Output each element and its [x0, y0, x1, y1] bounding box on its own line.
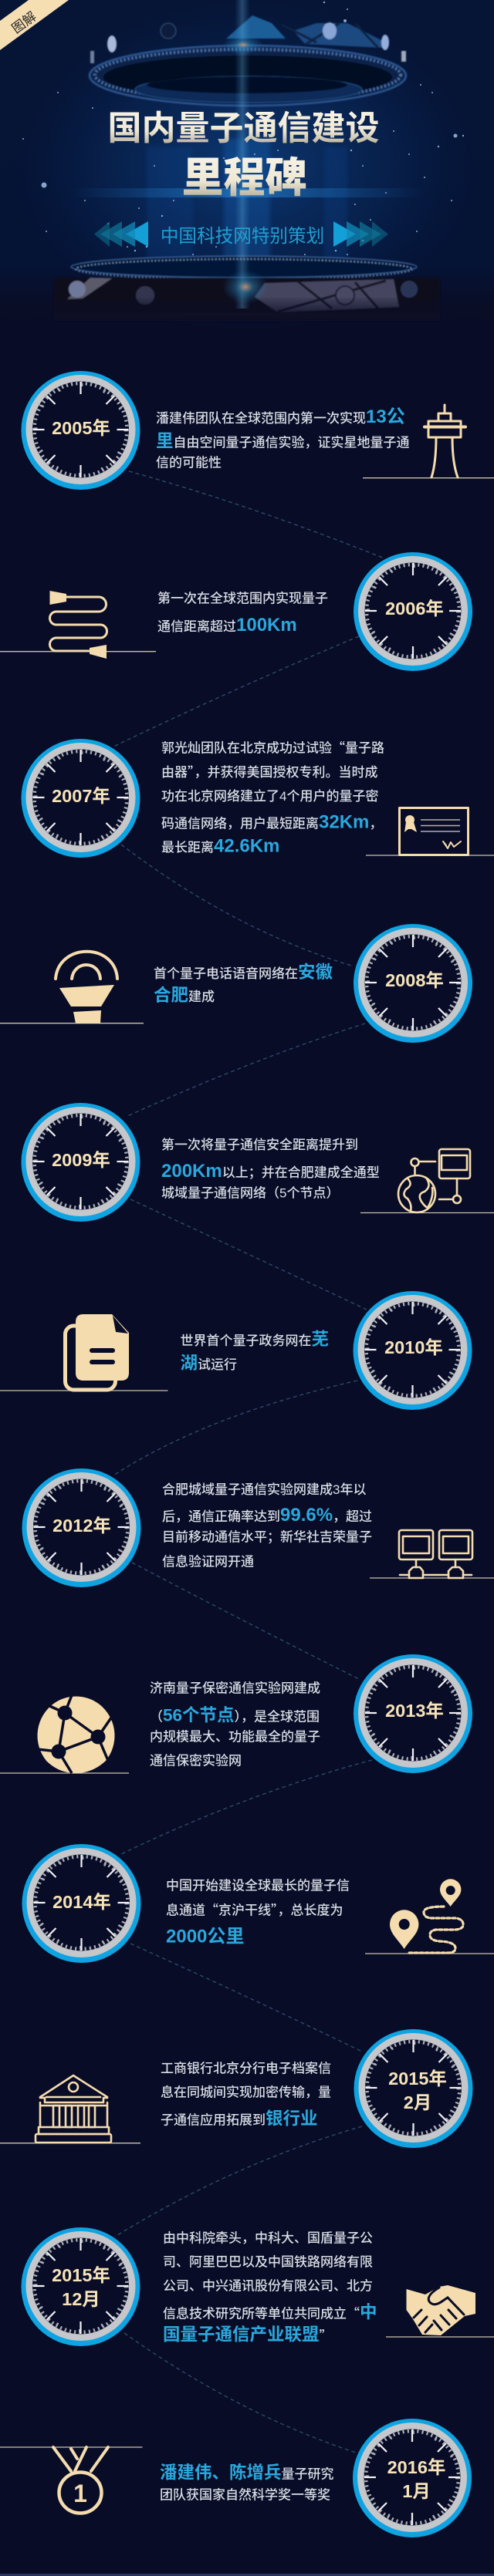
text: 2015-12 — [163, 2230, 377, 2345]
text: 2013: 济南量子保密通信实验网建成 — [150, 1680, 320, 1695]
text: 2015-12: 国量子通信产业联盟” — [163, 2325, 333, 2345]
upper ring — [90, 46, 406, 106]
title: 里程碑 — [182, 155, 307, 201]
clock: 2016年1月 — [353, 2419, 472, 2537]
text: 2006 — [157, 591, 328, 636]
text: 2012: 目前移动通信水平；新华社吉荣量子 — [162, 1530, 372, 1544]
text: 2005: 信的可能性 — [156, 455, 222, 470]
icon: two computers — [399, 1530, 472, 1578]
panel: 2015-12 — [22, 2227, 475, 2346]
text: 2007: 由器”，并获得美国授权专利。当时成 — [161, 761, 378, 781]
icon: cable — [49, 591, 107, 659]
clock: 2016年1月: 1月 — [402, 2481, 431, 2501]
text: 2010 — [181, 1330, 329, 1373]
text: 2015-02: 工商银行北京分行电子档案信 — [161, 2061, 331, 2076]
text: 2007: 码通信网络，用户最短距离32Km， — [161, 811, 382, 833]
icon: medal — [53, 2447, 108, 2513]
text: 2009: 200Km以上；并在合肥建成全通型 — [161, 1161, 380, 1182]
ribbon: 图解: 图解 — [9, 9, 39, 36]
text: 2013: 内规模最大、功能最全的量子 — [150, 1729, 320, 1745]
text: 2007 — [161, 737, 384, 856]
clock: 2005 — [22, 371, 140, 490]
title — [108, 110, 380, 201]
panel: 2008 — [56, 924, 472, 1043]
text: 2009: 城域量子通信网络（5个节点） — [161, 1185, 339, 1200]
text: 2012 — [162, 1482, 372, 1569]
clock: 2015年2月: 2015年 — [388, 2069, 447, 2089]
clock: 2013 — [354, 1654, 472, 1773]
clock: 2006 — [354, 552, 472, 671]
icon: documents — [65, 1314, 129, 1390]
text: 2015-12: 司、阿里巴巴以及中国铁路网络有限 — [163, 2254, 373, 2269]
panel: 2009 — [22, 1103, 470, 1222]
clock: 2015年12月: 12月 — [62, 2289, 100, 2309]
light beams — [69, 0, 425, 309]
upper ring plates — [90, 15, 406, 63]
text: 2015-12: 信息技术研究所等单位共同成立“中 — [163, 2303, 377, 2321]
icon baselines — [363, 477, 494, 479]
text: 2005: 里自由空间量子通信实验，证实星地量子通 — [156, 432, 410, 450]
text: 2016 — [160, 2463, 334, 2502]
text: 2009: 第一次将量子通信安全距离提升到 — [161, 1137, 358, 1152]
clock: 2016年1月: 2016年 — [387, 2457, 445, 2477]
icon: map pins — [390, 1879, 463, 1953]
text: 2016: 团队获国家自然科学奖一等奖 — [160, 2487, 330, 2502]
text: 2014: 息通道“京沪干线”，总长度为 — [166, 1899, 343, 1919]
panel: 2015-02 — [36, 2029, 472, 2148]
clock: 2009 — [22, 1103, 140, 1222]
lower ring — [54, 256, 440, 321]
text: 2010: 湖试运行 — [181, 1354, 237, 1373]
text: 2013: （56个节点），是全球范围 — [150, 1706, 320, 1725]
icon: certificate — [400, 808, 468, 855]
text: 2012: 合肥城域量子通信实验网建成3年以 — [162, 1482, 366, 1497]
clock: 2010 — [354, 1291, 472, 1410]
text: 2014: 2000公里 — [166, 1927, 244, 1947]
text: 2015-02: 子通信应用拓展到银行业 — [161, 2109, 318, 2129]
clock: 2008 — [354, 924, 472, 1043]
text: 2014: 中国开始建设全球最长的量子信 — [166, 1877, 350, 1893]
text: 2008 — [154, 963, 333, 1005]
text: 2007: 最长距离42.6Km — [161, 836, 279, 856]
clock: 2015年2月 — [354, 2029, 472, 2148]
panel: 2006 — [49, 552, 472, 671]
panel: 2012 — [22, 1468, 472, 1587]
text: 2007: 郭光灿团队在北京成功过试验“量子路 — [161, 737, 384, 756]
panel: 2007 — [22, 737, 468, 858]
icon: bank — [36, 2075, 111, 2143]
panel: 2005 — [22, 371, 465, 490]
panel: 2016 — [53, 2419, 472, 2537]
text: 2006: 通信距离超过100Km — [157, 615, 297, 636]
text: 2005 — [156, 406, 410, 470]
clock: 2014 — [22, 1844, 140, 1963]
clock: 2009: 2009年 — [52, 1150, 110, 1170]
text: 2014 — [166, 1877, 350, 1947]
text: 2012: 信息验证网开通 — [162, 1553, 254, 1569]
clock: 2006: 2006年 — [385, 598, 444, 619]
subtitle with arrows — [94, 221, 388, 247]
text: 2016: 潘建伟、陈增兵量子研究 — [160, 2463, 334, 2482]
clock: 2015年12月: 2015年 — [52, 2265, 110, 2285]
text: 2010: 世界首个量子政务网在芜 — [181, 1330, 329, 1349]
text: 2013 — [150, 1680, 320, 1768]
panel: 2014 — [22, 1844, 463, 1963]
panel: 2013 — [37, 1654, 472, 1773]
footer bar — [0, 2574, 494, 2576]
text: 2015-12: 公司、中兴通讯股份有限公司、北方 — [163, 2278, 373, 2294]
clock: 2008: 2008年 — [385, 970, 444, 990]
icon: medal: 1 — [73, 2480, 87, 2507]
stars — [22, 2, 464, 302]
text: 2009 — [161, 1137, 380, 1200]
icon: network — [398, 1149, 470, 1212]
text: 2012: 后，通信正确率达到99.6%，超过 — [162, 1505, 372, 1526]
text: 2008: 首个量子电话语音网络在安徽 — [154, 963, 333, 982]
icon: handshake — [406, 2285, 475, 2335]
clock: 2007: 2007年 — [52, 786, 110, 806]
text: 2015-12: 由中科院牵头，中科大、国盾量子公 — [163, 2230, 373, 2246]
dashed timeline connectors — [113, 471, 384, 2453]
panel: 2010 — [65, 1291, 472, 1410]
clock: 2012 — [22, 1468, 140, 1587]
clock: 2015年2月: 2月 — [404, 2092, 431, 2112]
icon: tower — [425, 405, 465, 477]
text: 2006: 第一次在全球范围内实现量子 — [157, 591, 328, 606]
clock: 2012: 2012年 — [52, 1516, 111, 1536]
text: 2007: 功在北京网络建立了4个用户的量子密 — [161, 788, 378, 804]
text: 2005: 潘建伟团队在全球范围内第一次实现13公 — [156, 406, 405, 427]
panel: header artwork — [0, 0, 494, 339]
text: 2015-02: 息在同城间实现加密传输，量 — [161, 2084, 331, 2099]
ribbon: 图解 — [0, 0, 69, 50]
text: 2008: 合肥建成 — [154, 986, 215, 1005]
clock: 2007 — [22, 739, 140, 858]
icon: lamp — [56, 952, 117, 1023]
icon: network globe — [37, 1695, 115, 1773]
title: 国内量子通信建设 — [108, 110, 380, 147]
clock: 2005: 2005年 — [52, 418, 110, 438]
subtitle with arrows: 中国科技网特别策划 — [161, 226, 324, 247]
clock: 2010: 2010年 — [384, 1337, 443, 1357]
text: 2013: 通信保密实验网 — [150, 1752, 242, 1768]
text: 2015-02 — [161, 2061, 331, 2129]
clock: 2014: 2014年 — [52, 1892, 111, 1912]
clock: 2015年12月 — [22, 2227, 140, 2346]
clock: 2013: 2013年 — [385, 1701, 444, 1721]
